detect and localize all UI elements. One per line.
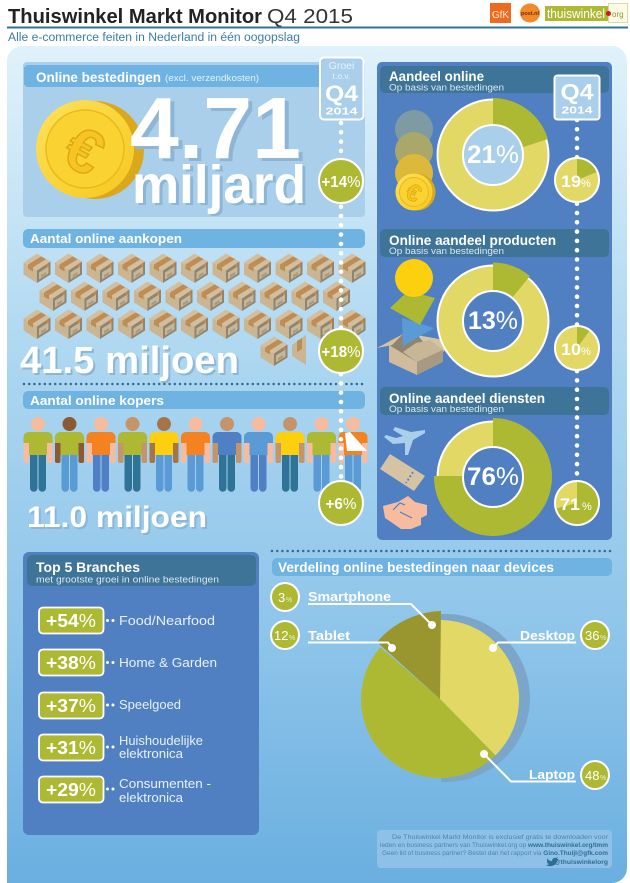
heading: online aandeel diensten: Op basis van bestedingen — [389, 404, 504, 415]
row: food/nearfood: Food/Nearfood — [119, 613, 215, 628]
callout: groei t.o.v. Q4 2014: Groei — [329, 60, 354, 72]
heading: online aandeel producten: Online aandeel producten — [389, 232, 556, 248]
callout: groei t.o.v. Q4 2014 — [320, 58, 364, 120]
panel: top 5 branches — [23, 552, 259, 835]
heading: aandeel online: Aandeel online — [389, 68, 484, 84]
callout: smartphone 3%: % — [286, 597, 292, 604]
callout: laptop 48%: 48 — [585, 768, 599, 783]
badge: +14%: +14% — [322, 174, 361, 191]
logo: PostNL: post.nl — [521, 11, 539, 17]
panel: aandeel — [377, 62, 612, 540]
heading: aantal online kopers: Aantal online kopers — [30, 393, 164, 408]
icon: ticket — [380, 454, 425, 491]
badge: +18% — [319, 329, 363, 373]
donut chart: 76% — [434, 418, 552, 536]
row: huishoudelijke elektronica: elektronica — [119, 746, 184, 761]
icon: coin stack — [395, 110, 436, 210]
callout: laptop 48%: % — [600, 775, 606, 782]
footer note — [377, 830, 612, 868]
footer note: leden en business partners van Thuiswinkel.org op www.thuiswinkel.org/tmm — [380, 842, 608, 849]
title: Thuiswinkel Markt Monitor — [8, 5, 262, 28]
heading: aandeel online: Op basis van bestedingen — [389, 82, 504, 94]
heading: top 5 branches — [27, 555, 256, 586]
logo: thuiswinkel.org — [545, 4, 628, 22]
donut chart: 21%: 21% — [467, 141, 519, 169]
callout: Q4 2014: 2014 — [562, 104, 593, 116]
row: food/nearfood — [39, 608, 215, 634]
footer note: De Thuiswinkel Markt Monitor is exclusief gratis te downloaden voor — [392, 834, 609, 841]
callout: tablet 12%: % — [289, 635, 295, 642]
row: huishoudelijke elektronica: +31% — [46, 738, 96, 758]
donut chart: 13% — [438, 262, 548, 376]
callout: desktop 36% — [489, 621, 609, 652]
heading: online bestedingen: Online bestedingen — [36, 70, 161, 85]
heading: aantal online aankopen — [23, 229, 365, 248]
logo: GfK: GfK — [492, 10, 509, 21]
heading: top 5 branches: met grootste groei in online bestedingen — [36, 574, 219, 586]
heading: verdeling online bestedingen: Verdeling online bestedingen naar devices — [278, 560, 554, 575]
small pie: 71%: 71 — [560, 495, 580, 514]
big word miljard: miljard — [132, 155, 306, 215]
row: consumenten-elektronica: Consumenten - — [119, 776, 211, 791]
callout: desktop 36%: 36 — [585, 628, 599, 643]
donut chart: 13%: 13% — [468, 307, 518, 335]
callout: laptop 48%: Laptop — [529, 767, 575, 782]
row: food/nearfood: +54% — [46, 611, 96, 631]
dotted divider — [24, 383, 364, 385]
growth timeline: left — [319, 58, 364, 525]
badge: +6%: +6% — [326, 496, 357, 513]
dotted divider — [272, 550, 612, 552]
icon: handshake — [383, 496, 427, 529]
icon row: people — [24, 417, 368, 492]
big number 4.71: 4.71 — [130, 80, 301, 177]
heading: online aandeel diensten: Online aandeel diensten — [389, 390, 545, 406]
panel: online bestedingen — [23, 62, 365, 217]
row: huishoudelijke elektronica — [39, 733, 203, 761]
row: consumenten-elektronica: elektronica — [119, 790, 184, 805]
row: speelgoed — [39, 692, 181, 718]
callout: desktop 36%: % — [600, 635, 606, 642]
heading: online bestedingen: (excl. verzendkosten) — [165, 73, 259, 83]
subtitle: Alle e-commerce feiten in Nederland in één oogopslag — [8, 32, 300, 44]
callout: tablet 12% — [271, 621, 396, 652]
donut chart: 76%: 76% — [467, 463, 519, 491]
number: 41.5 miljoen: 41.5 miljoen — [20, 340, 239, 382]
small pie: 19%: 19 — [561, 172, 581, 191]
logo: thuiswinkel.org: org — [612, 10, 624, 19]
icon: airplane — [384, 427, 425, 455]
callout: smartphone 3%: 3 — [278, 590, 285, 605]
row: consumenten-elektronica: +29% — [46, 780, 96, 800]
heading: aandeel online — [380, 66, 609, 94]
title: Q4 2015 — [267, 5, 353, 28]
callout: smartphone 3%: Smartphone — [308, 589, 391, 604]
row: consumenten-elektronica — [39, 776, 211, 805]
donut chart: 21% — [438, 98, 548, 210]
heading: online aandeel producten: Op basis van bestedingen — [389, 246, 504, 257]
badge: +14% — [319, 159, 363, 203]
heading: online bestedingen — [24, 65, 330, 87]
heading: online aandeel producten — [380, 229, 609, 257]
row: huishoudelijke elektronica: Huishoudelijke — [119, 733, 203, 748]
small pie: 71% — [555, 481, 599, 525]
callout: smartphone 3% — [271, 583, 436, 629]
small pie: 10%: % — [581, 346, 591, 358]
heading: online aandeel diensten — [380, 387, 609, 415]
row: speelgoed: Speelgoed — [119, 697, 181, 712]
logo: thuiswinkel.org: thuiswinkel — [547, 6, 605, 21]
small pie: 19% — [555, 158, 599, 202]
callout: groei t.o.v. Q4 2014: t.o.v. — [333, 71, 350, 81]
heading: aantal online kopers — [23, 391, 365, 409]
callout: desktop 36%: Desktop — [520, 628, 575, 643]
icon: coin stack: € — [401, 178, 426, 208]
heading: verdeling online bestedingen — [272, 558, 612, 576]
heading: aantal online aankopen: Aantal online aankopen — [30, 231, 182, 246]
footer note: Geen lid of business partner? Bestel dan het rapport via Gino.Thuijl@gfk.com — [382, 850, 608, 857]
row: speelgoed: +37% — [46, 696, 96, 716]
callout: Q4 2014: Q4 — [560, 80, 594, 104]
row: home and garden: Home & Garden — [119, 655, 217, 670]
title rule — [7, 26, 628, 28]
badge: +6% — [319, 481, 363, 525]
heading: top 5 branches: Top 5 Branches — [36, 559, 140, 575]
small pie: 10%: 10 — [561, 340, 581, 359]
callout: laptop 48% — [480, 750, 609, 789]
icon: twitter bird — [546, 857, 558, 866]
callout: tablet 12%: 12 — [274, 628, 288, 643]
callout: tablet 12%: Tablet — [308, 628, 351, 643]
number: 11.0 miljoen: 11.0 miljoen — [27, 501, 207, 534]
row: home and garden: +38% — [46, 653, 96, 673]
footer note: @thuiswinkelorg — [554, 859, 608, 866]
small pie: 19%: % — [581, 178, 591, 190]
small pie: 10% — [555, 326, 599, 370]
row: home and garden — [39, 650, 217, 676]
callout: groei t.o.v. Q4 2014: 2014 — [326, 106, 358, 118]
icon: euro coin: € — [52, 113, 115, 190]
pie chart: devices — [361, 611, 530, 782]
callout: groei t.o.v. Q4 2014: Q4 — [325, 81, 359, 106]
icon: euro coin — [36, 100, 144, 199]
icon: shapes in open box — [377, 259, 455, 375]
badge: +18%: +18% — [322, 344, 361, 361]
logo: PostNL — [520, 4, 540, 22]
growth timeline: right — [554, 76, 600, 525]
small pie: 71%: % — [582, 501, 592, 513]
callout: Q4 2014 — [554, 76, 600, 120]
icon grid: packages — [24, 254, 366, 366]
logo: GfK — [490, 3, 511, 23]
